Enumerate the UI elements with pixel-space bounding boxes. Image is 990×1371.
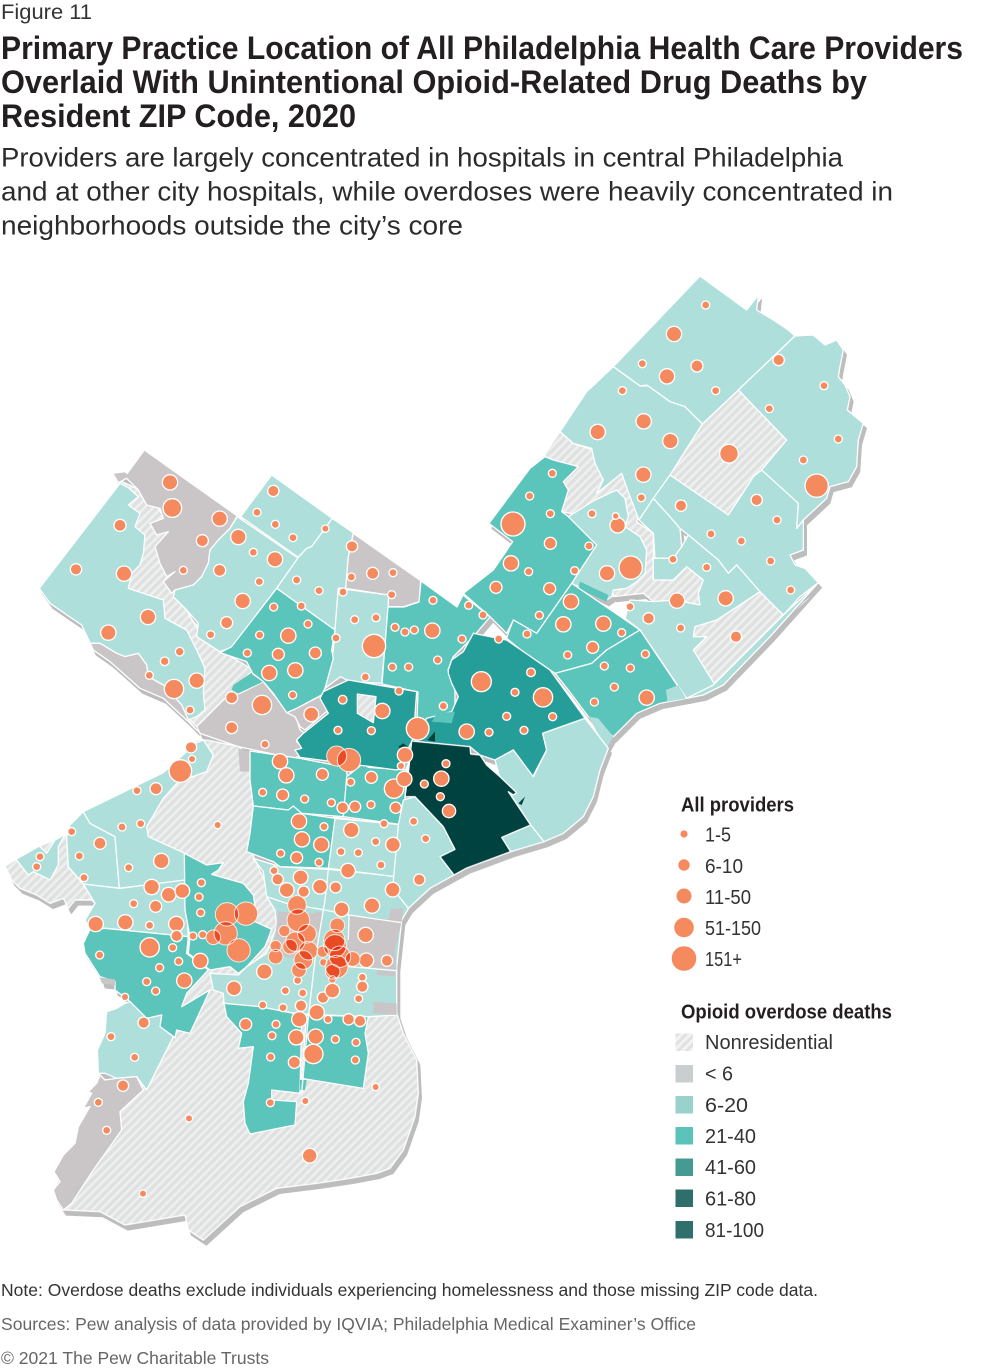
legend item 151+ [672, 946, 742, 971]
map drop shadow [8, 281, 866, 1245]
map of Philadelphia ZIP codes [5, 276, 866, 1245]
legend heading: all providers: All providers [681, 794, 794, 816]
legend swatch under 6: < 6 [705, 1062, 733, 1086]
title [1, 30, 963, 134]
legend swatch nonresidential: Nonresidential [705, 1031, 833, 1054]
legend swatch 41-60: 41-60 [705, 1156, 756, 1179]
legend swatch 81-100: 81-100 [705, 1219, 764, 1242]
subtitle [1, 142, 893, 240]
northwest regions [39, 450, 421, 758]
center city boundary lines [267, 867, 412, 1093]
legend item 6-10 [678, 855, 743, 878]
legend item 151+: 151+ [705, 948, 742, 971]
note: Note: Overdose deaths exclude individuals experiencing homelessness and those missing ZIP code data. [1, 1280, 818, 1300]
legend item 51-150 [674, 917, 761, 940]
legend swatch 6-20 [676, 1094, 748, 1117]
legend swatch 21-40 [676, 1125, 756, 1148]
provider circles: northeast [440, 302, 842, 739]
subtitle: and at other city hospitals, while overdoses were heavily concentrated in [1, 176, 893, 206]
provider circles: overlapping center city cluster [206, 746, 361, 983]
legend swatch 61-80: 61-80 [705, 1188, 756, 1210]
center city grey areas [273, 908, 403, 977]
nonresidential hatched areas [5, 390, 787, 1240]
legend item 1-5: 1-5 [705, 824, 731, 846]
sources: Sources: Pew analysis of data provided by IQVIA; Philadelphia Medical Examiner’s Office [1, 1314, 696, 1334]
upper central teal regions [247, 680, 417, 877]
east central regions [393, 633, 608, 908]
legend swatch 61-80 [676, 1188, 756, 1210]
legend item 6-10: 6-10 [705, 855, 743, 878]
provider circles: south and west [33, 742, 455, 1197]
ZIP code regions [5, 276, 863, 1240]
legend item 11-50 [676, 886, 751, 909]
legend swatch 81-100 [676, 1219, 764, 1242]
legend item 11-50: 11-50 [705, 886, 751, 909]
title: Resident ZIP Code, 2020 [1, 98, 356, 134]
legend item 1-5 [680, 824, 731, 846]
south and west regions [16, 740, 412, 1210]
legend swatch 21-40: 21-40 [705, 1125, 756, 1148]
copyright: © 2021 The Pew Charitable Trusts [1, 1348, 269, 1368]
legend swatch 6-20: 6-20 [705, 1094, 748, 1117]
title: Overlaid With Unintentional Opioid-Related Drug Deaths by [1, 64, 867, 100]
subtitle: Providers are largely concentrated in hospitals in central Philadelphia [1, 142, 844, 172]
central north regions [382, 581, 490, 721]
legend: opioid overdose deaths [676, 1000, 892, 1242]
figure label: Figure 11 [1, 1, 92, 24]
provider circles [33, 302, 842, 1197]
legend heading: opioid overdose deaths: Opioid overdose deaths [681, 1000, 892, 1024]
northeast regions [463, 276, 863, 748]
subtitle: neighborhoods outside the city’s core [1, 210, 463, 240]
legend item 51-150: 51-150 [705, 917, 761, 940]
provider circles: northwest [71, 475, 447, 748]
legend swatch under 6 [676, 1062, 733, 1086]
legend swatch 41-60 [676, 1156, 756, 1179]
legend: all providers [672, 794, 794, 971]
